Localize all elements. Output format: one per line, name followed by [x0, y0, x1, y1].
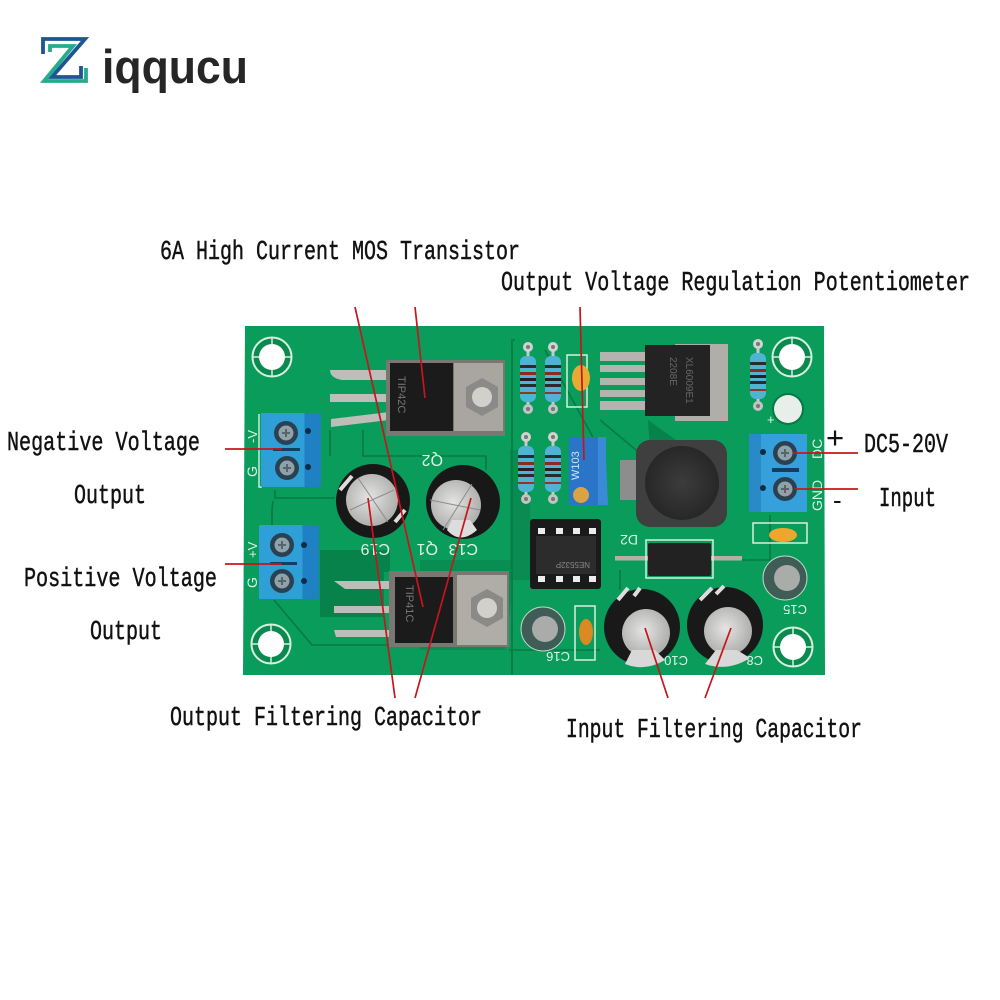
inductor: [620, 440, 727, 527]
label: positive output: Output: [90, 618, 162, 648]
logo mark: Z: [43, 39, 86, 81]
silkscreen labels: C19: [361, 540, 390, 557]
logo wordmark: iqqucu: [102, 40, 248, 93]
capacitor C19: [336, 464, 410, 538]
potentiometer: [569, 437, 608, 505]
XL6009 regulator: [600, 344, 728, 421]
XL6009 regulator: XL6009E1: [683, 357, 694, 404]
silkscreen labels: C13: [449, 540, 478, 557]
potentiometer: W103: [570, 451, 582, 480]
label: MOS transistor: 6A High Current MOS Transistor: [160, 238, 520, 268]
silkscreen labels: Q1: [417, 540, 438, 557]
NE5532 op amp socket: [530, 519, 601, 589]
silkscreen labels: +V: [245, 541, 260, 558]
label: DC range: DC5-20V: [864, 431, 949, 461]
capacitor C15: [763, 556, 807, 600]
pcb base: [243, 326, 825, 675]
callout lines: [225, 307, 858, 698]
transistor Q1 TIP41C: TIP41C: [403, 585, 415, 622]
capacitor C16: [521, 607, 565, 651]
LED pad: [767, 393, 804, 427]
copper traces: [272, 340, 770, 675]
capacitor C8: [687, 586, 763, 667]
terminal block +V: [259, 525, 319, 599]
logo: [43, 39, 248, 93]
orange ceramic capacitors: [567, 355, 807, 660]
polarity minus: -: [833, 485, 842, 515]
silkscreen labels: DC: [809, 439, 825, 459]
mounting holes: [251, 337, 813, 667]
diode D2: [615, 540, 742, 578]
label: input: Input: [879, 485, 936, 515]
silkscreen labels: -V: [245, 430, 260, 443]
NE5532 op amp socket: NE5532P: [556, 560, 590, 569]
darker copper pours: [320, 420, 690, 650]
label: positive voltage: Positive Voltage: [24, 565, 217, 595]
LED pad: +: [767, 412, 775, 427]
silkscreen labels: GND: [809, 480, 825, 511]
transistor Q2 TIP42C: [330, 360, 505, 436]
silkscreen labels: D2: [620, 532, 638, 548]
polarity plus: +: [826, 420, 844, 455]
silkscreen labels: G: [244, 577, 260, 588]
silkscreen labels: G: [244, 466, 260, 477]
label: negative output: Output: [74, 482, 146, 512]
capacitor C13: [426, 465, 500, 539]
terminal block DC input: [749, 434, 807, 512]
XL6009 regulator: 2208E: [667, 357, 678, 386]
label: output filtering capacitor: Output Filtering Capacitor: [170, 704, 482, 734]
circuit board: [243, 326, 825, 675]
resistors: [518, 339, 766, 504]
silkscreen labels: [244, 430, 825, 668]
terminal block -V: [259, 413, 321, 487]
transistor Q1 TIP41C: [334, 571, 509, 647]
silkscreen labels: C16: [546, 649, 570, 664]
silkscreen labels: C8: [746, 653, 763, 668]
label: negative voltage: Negative Voltage: [7, 429, 200, 459]
silkscreen labels: C15: [783, 602, 807, 617]
silkscreen labels: Q2: [422, 451, 443, 468]
silkscreen labels: C10: [664, 653, 688, 668]
label: input filtering capacitor: Input Filtering Capacitor: [566, 716, 862, 746]
capacitor C10: [604, 588, 680, 667]
transistor Q2 TIP42C: TIP42C: [395, 376, 407, 413]
